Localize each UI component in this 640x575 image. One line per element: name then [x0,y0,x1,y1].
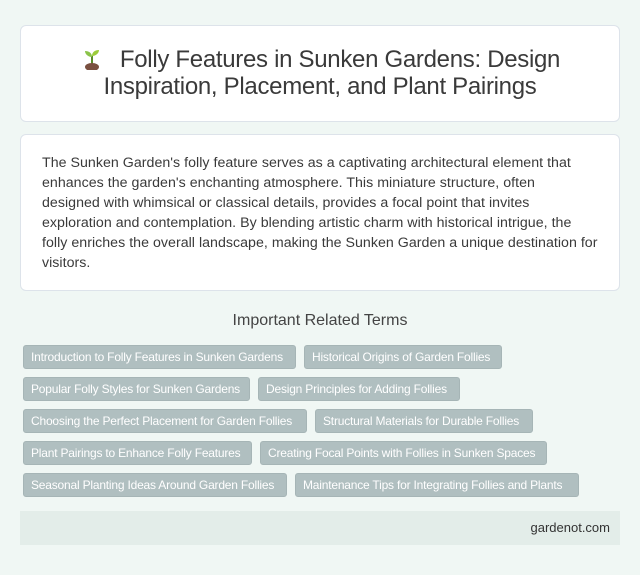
related terms heading: Important Related Terms [233,312,407,329]
related terms tags: Creating Focal Points with Follies in Sunken Spaces [268,446,535,460]
related terms tags: Structural Materials for Durable Follies [323,414,519,428]
intro paragraph: designed with whimsical or classical details, provides a focal point that invites [42,195,529,211]
intro paragraph: enhances the garden's enchanting atmosphere. This miniature structure, often [42,175,535,191]
intro paragraph [42,155,598,271]
intro paragraph: exploration and contemplation. By blending artistic charm with historical intrigue, the [42,215,571,231]
intro paragraph: The Sunken Garden's folly feature serves as a captivating architectural element that [42,155,571,171]
related terms tags: Design Principles for Adding Follies [266,382,447,396]
footer source text: gardenot.com [530,520,610,535]
header card [20,25,620,122]
related terms tags: Choosing the Perfect Placement for Garden Follies [31,414,292,428]
intro paragraph: visitors. [42,255,90,271]
related terms tags: Introduction to Folly Features in Sunken Gardens [31,350,283,364]
related terms tags: Maintenance Tips for Integrating Follies and Plants [303,478,562,492]
related terms tags: Seasonal Planting Ideas Around Garden Follies [31,478,274,492]
title: Folly Features in Sunken Gardens: Design Inspiration, Placement, and Plant Pairings [104,46,560,100]
related terms tags: Plant Pairings to Enhance Folly Features [31,446,240,460]
related terms tags: Popular Folly Styles for Sunken Gardens [31,382,240,396]
icon: sprout [85,50,99,70]
footer [20,511,620,545]
intro text card [20,134,620,291]
related terms tags: Historical Origins of Garden Follies [312,350,490,364]
intro paragraph: folly enriches the overall landscape, making the Sunken Garden a unique destination for [42,235,597,251]
